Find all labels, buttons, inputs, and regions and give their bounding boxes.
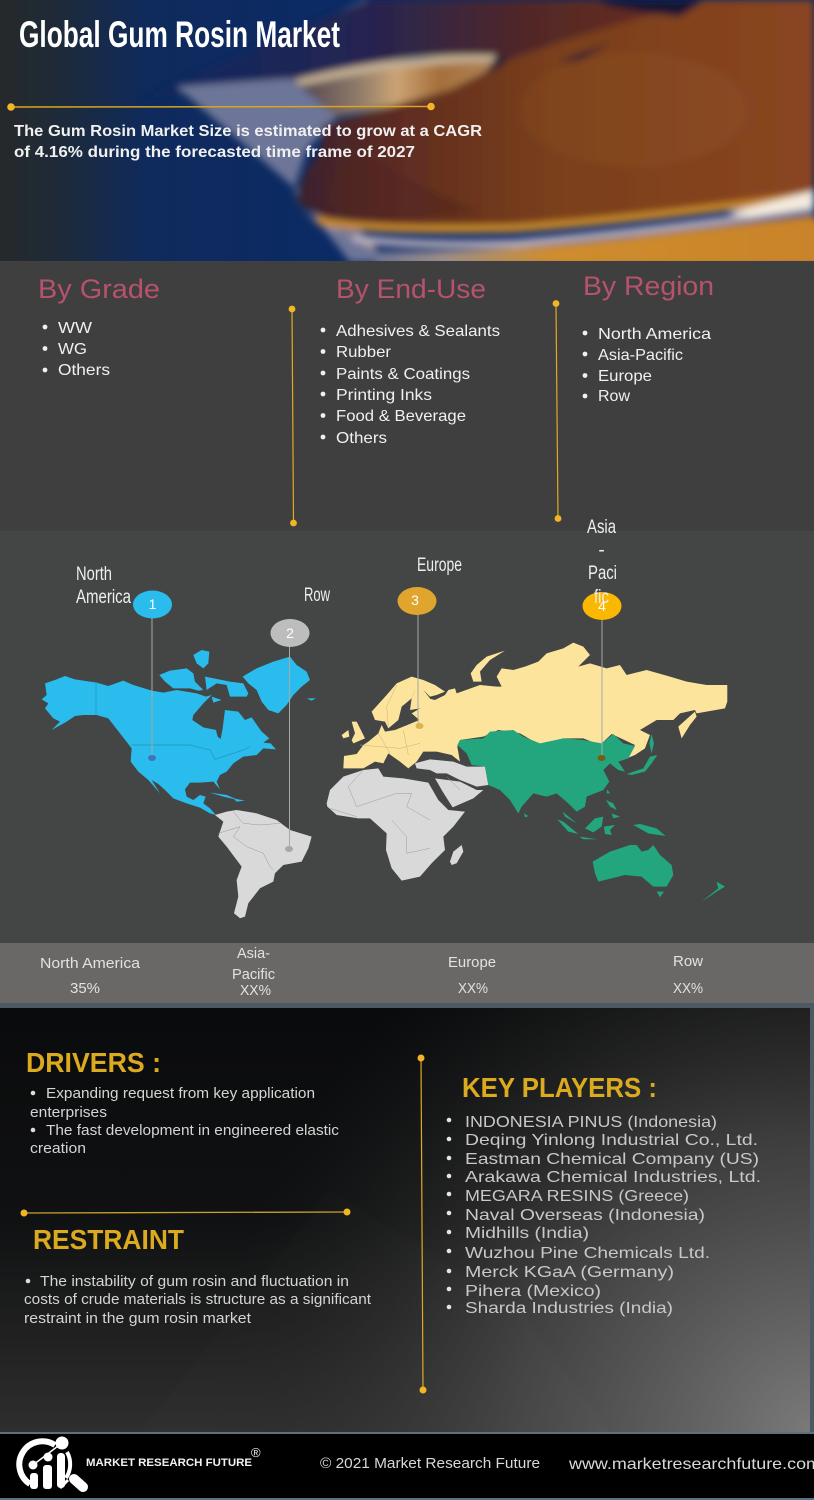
column: by grade: WG (58, 341, 87, 358)
column: by region: North America (598, 326, 711, 343)
map pin: North America (133, 590, 172, 761)
map label: North America (76, 564, 131, 608)
restraint text: restraint in the gum rosin market (24, 1310, 252, 1327)
share: Europe: Europe (448, 954, 496, 971)
region: North America (42, 650, 316, 815)
map: Americas (42, 650, 316, 918)
vertical divider 1 (289, 306, 297, 526)
share: Asia-Pacific: Pacific (232, 966, 275, 983)
drivers list: Expanding request from key application (46, 1085, 315, 1102)
column: by end-use: Others (336, 430, 387, 447)
share: North America: North America (40, 955, 141, 972)
vertical divider 2 (553, 300, 561, 522)
horizontal divider (20, 1208, 350, 1216)
column: by region: Europe (598, 368, 652, 385)
share: Europe: XX% (458, 980, 488, 997)
share: Row (673, 953, 703, 997)
country borders: Europe (360, 685, 420, 755)
key players list: Naval Overseas (Indonesia) (465, 1207, 705, 1224)
restraint text (24, 1273, 372, 1327)
map label: North America: North (76, 564, 112, 585)
key players list: Wuzhou Pine Chemicals Ltd. (465, 1245, 710, 1262)
map label: Europe: Europe (417, 555, 462, 576)
registered mark: ® (251, 1445, 261, 1460)
title: Global Gum Rosin Market (19, 14, 340, 55)
subtitle: of 4.16% during the forecasted time frame of 2027 (14, 144, 415, 161)
country borders: Africa (330, 770, 460, 853)
share: Asia-Pacific (232, 945, 275, 999)
share: Europe (448, 954, 496, 997)
panel: segmentation (0, 261, 814, 531)
column: by grade: WW (58, 320, 93, 337)
map pin: North America: 1 (149, 596, 157, 612)
map label: Asia-Pacific: Paci (588, 563, 617, 584)
drivers list: creation (30, 1140, 86, 1157)
map pin: Europe: 3 (411, 592, 419, 608)
restraint text: costs of crude materials is structure as a significant (24, 1291, 372, 1308)
region: Europe and Russia (342, 643, 727, 768)
map pin: Row (270, 619, 310, 852)
key players list: Deqing Yinlong Industrial Co., Ltd. (465, 1132, 758, 1149)
brand name: MARKET RESEARCH FUTURE (86, 1457, 252, 1469)
map pin: Row: 2 (286, 625, 294, 641)
share: North America: 35% (70, 980, 100, 997)
column: by grade: By Grade (38, 274, 160, 304)
column: by end-use: Printing Inks (336, 387, 432, 404)
share: Row: Row (673, 953, 703, 970)
map pin: Asia-Pacific (582, 592, 622, 761)
icon: market research future logo (19, 1436, 83, 1489)
column: by region: Asia-Pacific (598, 347, 683, 364)
region: South America (215, 810, 312, 918)
panel: world map (0, 517, 814, 943)
column: by region (583, 271, 714, 405)
map: Europe, Africa, Asia and Oceania (327, 643, 727, 902)
map pin: Europe (398, 587, 436, 729)
region: Asia-Pacific (457, 730, 725, 902)
map pin: Asia-Pacific: 4 (598, 598, 606, 614)
drivers list (30, 1085, 340, 1157)
column: by end-use: Rubber (336, 344, 392, 361)
map label: North America: America (76, 587, 131, 608)
subtitle (14, 123, 482, 161)
divider with end dots (7, 103, 435, 111)
column: by end-use: Food & Beverage (336, 408, 466, 425)
panel: drivers, restraint and key players (0, 1008, 814, 1433)
panel: regional share table (0, 943, 814, 1008)
drivers list: enterprises (30, 1104, 107, 1121)
map label: Asia-Pacific: fic (594, 587, 609, 608)
map label: Asia-Pacific: - (598, 540, 605, 561)
copyright: © 2021 Market Research Future (320, 1455, 540, 1472)
column: by end-use (321, 274, 500, 447)
share: Asia-Pacific: XX% (240, 982, 271, 999)
panel: footer (0, 1432, 814, 1500)
key players list: Pihera (Mexico) (465, 1283, 601, 1300)
column: by end-use: Adhesives & Sealants (336, 323, 500, 340)
region: Africa and Middle East (327, 759, 488, 881)
column: by end-use: Paints & Coatings (336, 366, 470, 383)
website: www.marketresearchfuture.com (568, 1456, 814, 1473)
violin photo background (137, 0, 814, 267)
drivers list: The fast development in engineered elastic (46, 1122, 340, 1139)
column: by end-use: By End-Use (336, 274, 486, 304)
vertical divider (418, 1054, 426, 1394)
key players list: Midhills (India) (465, 1225, 589, 1242)
key players list (447, 1114, 761, 1317)
map label: Asia-Pacific: Asia (587, 517, 616, 538)
column: by grade (38, 274, 160, 379)
column: by region: Row (598, 388, 630, 405)
key players list: Arakawa Chemical Industries, Ltd. (465, 1169, 761, 1186)
restraint text: The instability of gum rosin and fluctuation in (40, 1273, 349, 1290)
key players list: Merck KGaA (Germany) (465, 1264, 674, 1281)
share: North America (40, 955, 141, 997)
map label: Asia-Pacific (587, 517, 617, 608)
key players heading: KEY PLAYERS : (462, 1072, 657, 1103)
panel: hero header (0, 0, 814, 267)
key players list: Sharda Industries (India) (465, 1300, 673, 1317)
map label: Row: Row (304, 585, 330, 606)
share: Row: XX% (673, 980, 703, 997)
key players list: INDONESIA PINUS (Indonesia) (465, 1114, 717, 1131)
share: Asia-Pacific: Asia- (237, 945, 270, 962)
restraint heading: RESTRAINT (33, 1224, 184, 1255)
subtitle: The Gum Rosin Market Size is estimated to grow at a CAGR (14, 123, 482, 140)
country borders: North America (96, 683, 250, 759)
key players list: MEGARA RESINS (Greece) (465, 1188, 689, 1205)
drivers heading: DRIVERS : (26, 1047, 161, 1078)
key players list: Eastman Chemical Company (US) (465, 1151, 759, 1168)
column: by grade: Others (58, 362, 110, 379)
column: by region: By Region (583, 271, 714, 301)
